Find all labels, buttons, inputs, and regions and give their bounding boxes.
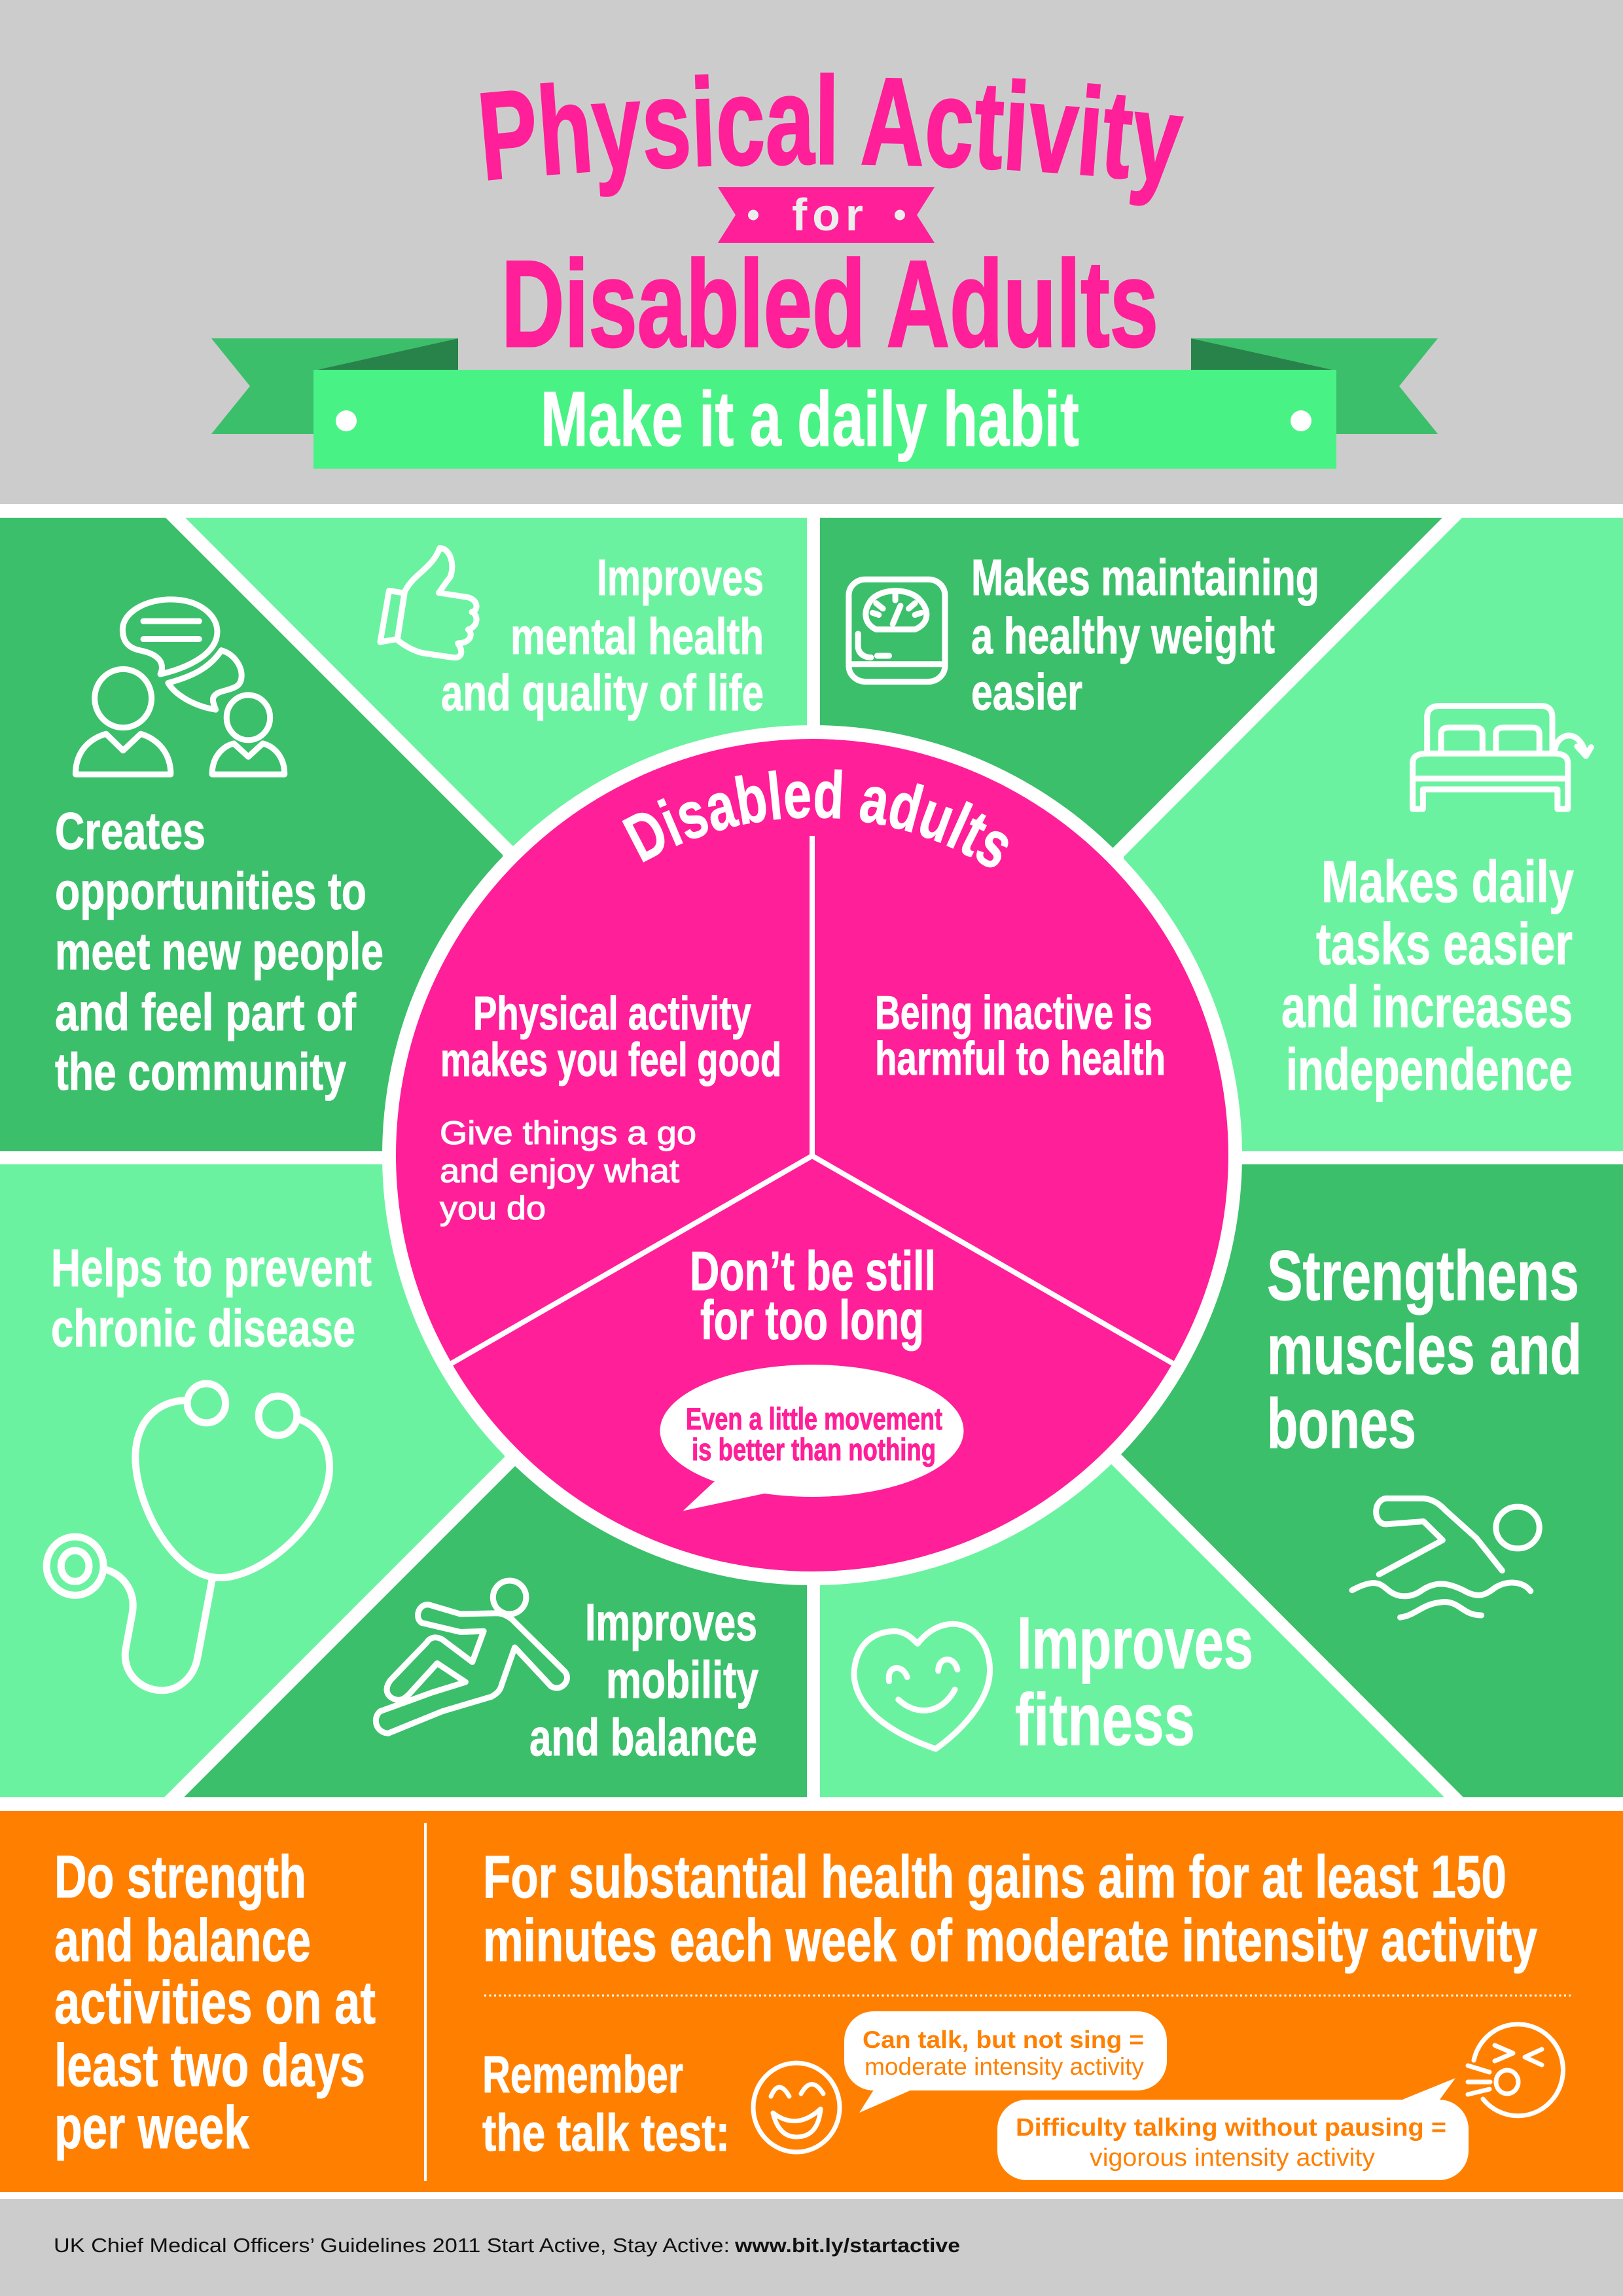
panel: daily tasks [1124, 518, 1623, 1151]
callout: moderate intensity: Can talk, but not sing = [863, 2026, 1144, 2053]
text: strength and balance: activities on at [54, 1969, 376, 2036]
text: muscles and bones [1267, 1236, 1582, 1463]
ribbon: Make it a daily habit: Make it a daily habit [541, 376, 1079, 463]
panel: muscles and bones [1121, 1164, 1623, 1797]
text: strength and balance [54, 1844, 376, 2161]
segment: inactive: Being inactive is [875, 987, 1152, 1039]
segment: feel good: and enjoy what [440, 1153, 679, 1189]
text: strength and balance: and balance [54, 1907, 311, 1974]
panel: community [0, 518, 503, 1151]
panel: orange guidance [0, 1811, 1623, 2192]
text: chronic disease [51, 1239, 372, 1358]
text: mental health: Improves [597, 548, 764, 606]
segment: feel good: makes you feel good [440, 1034, 781, 1086]
divider [424, 1823, 427, 2181]
icon: running figure [376, 1581, 567, 1733]
panel: healthy weight [820, 518, 1442, 848]
central circle [382, 725, 1242, 1585]
title: Disabled Adults: Disabled Adults [501, 235, 1158, 372]
segment: feel good: you do [440, 1190, 546, 1227]
callout: vigorous intensity [997, 2078, 1469, 2180]
text: mental health [441, 548, 764, 721]
circle dividers [452, 836, 1173, 1363]
callout: moderate intensity [844, 2011, 1167, 2113]
circle heading: Disabled adults: Disabled adults [622, 769, 1008, 868]
text: mental health: and quality of life [441, 664, 764, 721]
icon: stethoscope [46, 1384, 330, 1691]
text: creates opportunities: meet new people [55, 922, 383, 980]
icon: swimmer [1352, 1498, 1539, 1617]
segment: don't be still: for too long [700, 1289, 924, 1351]
text: mental health: mental health [510, 607, 764, 665]
callout: even a little movement: Even a little movement [686, 1401, 942, 1436]
icon: happy face [753, 2063, 840, 2152]
segment: feel good [440, 988, 781, 1227]
title: Physical Activity: Physical Activity [480, 72, 1185, 206]
text: strength and balance: Do strength [54, 1844, 306, 1910]
text: creates opportunities: Creates [55, 802, 205, 860]
text: remember the talk test: the talk test: [482, 2104, 730, 2162]
panel: mobility [184, 1466, 807, 1797]
segment: inactive [875, 987, 1166, 1085]
icon: chat people [75, 600, 285, 774]
text: mobility: and balance [529, 1708, 757, 1767]
text: remember the talk test [482, 2045, 730, 2162]
callout: vigorous intensity: Difficulty talking without pausing = [1016, 2114, 1446, 2142]
text: 150 minutes [483, 1844, 1537, 1974]
callout: vigorous intensity: vigorous intensity activity [1090, 2144, 1375, 2172]
icon: out of breath face [1468, 2024, 1563, 2116]
segment: feel good: Physical activity [473, 988, 751, 1040]
segment: don't be still: Don’t be still [690, 1240, 936, 1302]
text: healthy weight: a healthy weight [971, 607, 1275, 664]
text: muscles and bones: bones [1267, 1384, 1416, 1463]
segment: don't be still [690, 1240, 936, 1351]
text: healthy weight [971, 548, 1319, 721]
callout: even a little movement: is better than nothing [692, 1432, 936, 1467]
text: healthy weight: easier [971, 663, 1082, 721]
segment: inactive: harmful to health [875, 1033, 1166, 1085]
icon: bed [1413, 706, 1591, 809]
text: mobility: mobility [606, 1651, 758, 1709]
panel: mental health [185, 518, 807, 846]
source text: UK Chief Medical Officers’ Guidelines 2011 Start Active, Stay Active: [54, 2234, 730, 2257]
icon: smiling heart [854, 1624, 990, 1749]
text: mobility: Improves [585, 1593, 757, 1651]
text: fitness: Improves [1017, 1602, 1253, 1684]
panel: chronic disease [0, 1164, 505, 1797]
text: strength and balance: per week [54, 2094, 250, 2161]
icon: weighing scale [849, 579, 945, 681]
callout: even a little movement [660, 1365, 963, 1511]
text: chronic disease: chronic disease [51, 1299, 355, 1358]
icon: thumbs up [380, 548, 476, 658]
text: daily tasks [1281, 850, 1574, 1103]
text: strength and balance: least two days [54, 2032, 365, 2099]
segment: feel good: Give things a go [440, 1115, 696, 1151]
text: fitness: fitness [1015, 1679, 1195, 1761]
ribbon: Make it a daily habit [211, 338, 1438, 469]
footer background [0, 2199, 1623, 2296]
source link: www.bit.ly/startactive [734, 2234, 960, 2257]
text: creates opportunities: opportunities to [55, 862, 366, 920]
banner: for: for [792, 189, 863, 240]
text: creates opportunities [55, 802, 383, 1101]
banner: for [718, 187, 935, 243]
text: healthy weight: Makes maintaining [971, 548, 1319, 606]
callout: moderate intensity: moderate intensity activity [865, 2053, 1144, 2080]
text: creates opportunities: and feel part of [55, 983, 356, 1041]
header background [0, 0, 1623, 504]
text: chronic disease: Helps to prevent [51, 1239, 372, 1298]
panel: fitness [820, 1464, 1444, 1797]
text: creates opportunities: the community [55, 1043, 346, 1101]
circle heading: Disabled adults [622, 769, 1008, 868]
text: fitness [1015, 1602, 1253, 1761]
text: mobility [529, 1593, 758, 1767]
text: remember the talk test: Remember [482, 2045, 683, 2104]
